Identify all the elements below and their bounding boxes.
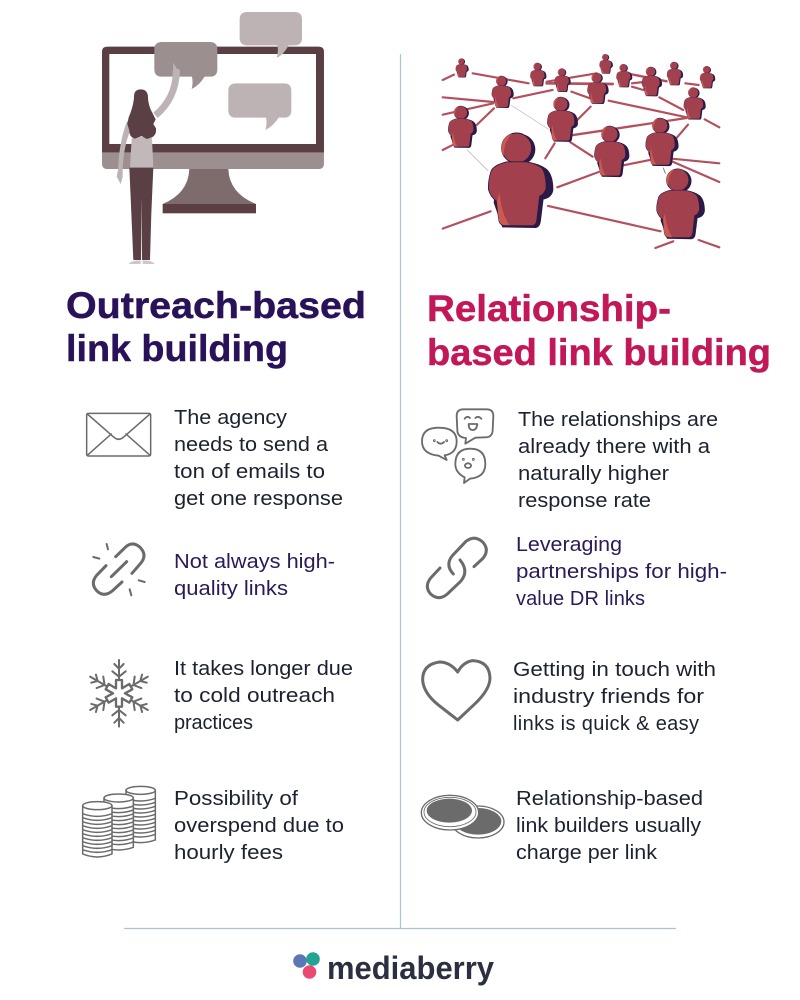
text: charge per link: charge per link <box>516 842 658 864</box>
heading: relationship-based: based link building <box>427 332 771 373</box>
text: partnerships: partnerships for high- <box>516 561 727 583</box>
text: quick and easy: industry friends for <box>513 686 704 708</box>
illustration: woman at monitor with speech bubbles <box>102 12 324 264</box>
text: quick and easy: links is quick & easy <box>513 713 699 735</box>
logo: mediaberry: mediaberry <box>327 950 494 986</box>
heading: relationship-based: Relationship- <box>427 288 671 329</box>
text: relationships: already there with a <box>518 436 711 458</box>
speech bubble: on monitor edge <box>154 42 217 89</box>
heading: outreach-based: link building <box>66 328 288 369</box>
text: hourly fees: hourly fees <box>174 842 283 864</box>
text: cold outreach: to cold outreach <box>174 685 335 707</box>
text: partnerships: value DR links <box>516 588 645 610</box>
icon: envelope <box>87 413 151 456</box>
text: hourly fees: overspend due to <box>174 815 344 837</box>
text: relationships <box>518 409 718 512</box>
icon: snowflake <box>87 660 151 727</box>
text: hourly fees <box>174 788 344 864</box>
icon: coins <box>421 795 504 838</box>
speech bubble: centre <box>228 83 291 130</box>
monitor <box>102 47 324 213</box>
text: charge per link <box>516 788 703 864</box>
text: emails: needs to send a <box>174 434 329 456</box>
text: quick and easy <box>513 659 716 735</box>
centre vertical divider <box>400 54 402 928</box>
text: relationships: response rate <box>518 490 651 512</box>
text: emails: ton of emails to <box>174 461 325 483</box>
text: emails: get one response <box>174 488 343 510</box>
illustration: network of people <box>443 54 719 248</box>
text: link quality <box>174 551 335 600</box>
woman figure <box>117 63 180 264</box>
text: quick and easy: Getting in touch with <box>513 659 716 681</box>
text: cold outreach: practices <box>174 712 253 734</box>
text: emails: The agency <box>174 407 287 429</box>
speech bubble: top <box>240 12 302 58</box>
text: relationships: naturally higher <box>518 463 669 485</box>
text: charge per link: Relationship-based <box>516 788 703 810</box>
icon: coin stacks <box>83 786 155 858</box>
icon: heart <box>423 661 490 720</box>
people <box>448 54 715 239</box>
text: link quality: quality links <box>174 578 288 600</box>
heading: relationship-based <box>427 288 771 373</box>
connecting lines <box>443 73 719 248</box>
heading: outreach-based: Outreach-based <box>66 285 366 326</box>
bottom divider <box>124 928 676 930</box>
icon: chain link <box>427 538 486 598</box>
text: charge per link: link builders usually <box>516 815 701 837</box>
text: partnerships <box>516 534 727 610</box>
text: cold outreach: It takes longer due <box>174 658 353 680</box>
icon: broken link <box>93 544 145 595</box>
text: relationships: The relationships are <box>518 409 718 431</box>
text: emails <box>174 407 343 510</box>
icon: chat bubbles <box>422 409 493 483</box>
text: link quality: Not always high- <box>174 551 335 573</box>
heading: outreach-based <box>66 285 366 369</box>
text: hourly fees: Possibility of <box>174 788 298 810</box>
text: partnerships: Leveraging <box>516 534 622 556</box>
text: cold outreach <box>174 658 353 734</box>
